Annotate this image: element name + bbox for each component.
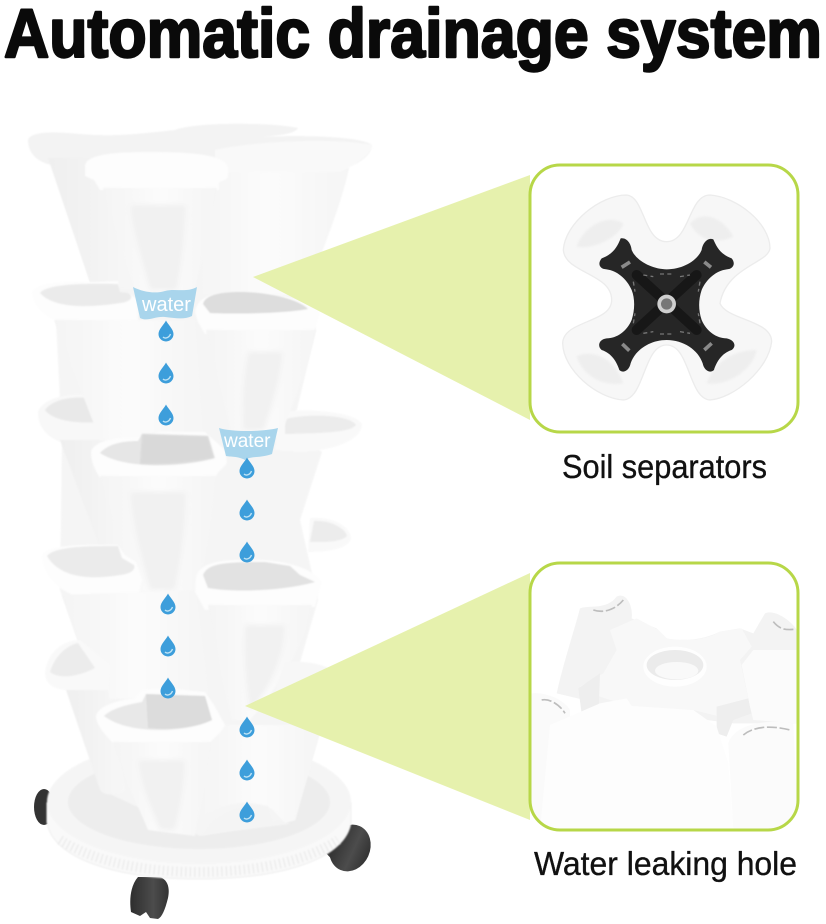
green callout beam to water leaking hole (245, 573, 530, 820)
black cross separator (599, 238, 734, 372)
fifth tier back pots (45, 640, 336, 835)
top tier back pots (28, 124, 372, 295)
second tier pots (32, 281, 320, 440)
caption: water leaking hole: Water leaking hole (534, 845, 797, 882)
wheels (34, 789, 378, 919)
caption: soil separators: Soil separators (562, 448, 767, 485)
fifth tier front pot (96, 688, 225, 836)
third tier back pots (38, 394, 362, 550)
water label one: water (141, 294, 191, 316)
green callout beam to soil separators (253, 175, 530, 420)
water label two: water (223, 431, 271, 452)
green border (530, 563, 798, 830)
water drops column two (240, 458, 254, 822)
panel: soil separators (530, 165, 798, 432)
water label one (133, 287, 197, 319)
top tier front pot (85, 152, 228, 292)
tray (47, 740, 351, 879)
third tier front pot (91, 432, 227, 592)
water drops column one (158, 320, 176, 698)
water label two (219, 428, 278, 460)
fourth tier back pot (308, 518, 351, 552)
plant tower illustration (28, 124, 530, 919)
fourth tier pots (42, 545, 322, 720)
tower silhouette backing (52, 165, 345, 836)
white clover base (563, 195, 772, 400)
pot underside close-up (542, 596, 796, 736)
panel: water leaking hole (530, 563, 798, 830)
